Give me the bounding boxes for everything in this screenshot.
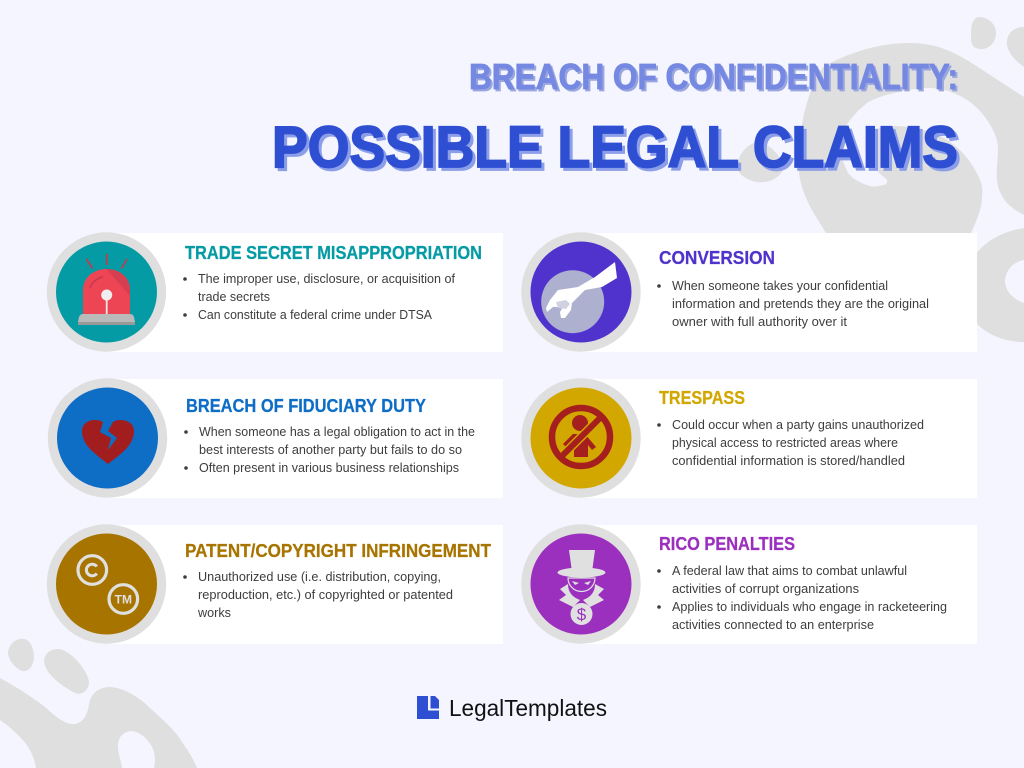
bullet list: Unauthorized use (i.e. distribution, copying,	[198, 570, 441, 584]
icon: broken heart	[82, 420, 134, 464]
bullet list: activities of corrupt organizations	[672, 582, 859, 596]
panel: rico penalties	[521, 524, 977, 644]
bullet list: works	[197, 606, 231, 620]
bullet list: information and pretends they are the original	[672, 297, 929, 311]
bullet list: When someone has a legal obligation to act in the	[199, 425, 475, 439]
bullet list	[657, 418, 924, 468]
heading: BREACH OF FIDUCIARY DUTY	[186, 396, 426, 416]
bullet list: reproduction, etc.) of copyrighted or patented	[198, 588, 453, 602]
icon: copyright and trademark	[78, 556, 138, 613]
main heading: possible legal claims: POSSIBLE LEGAL CLAIMS	[272, 115, 958, 180]
bullet list	[657, 279, 929, 329]
subtitle: breach of confidentiality: BREACH OF CONFIDENTIALITY:	[471, 58, 960, 99]
panel: trespass	[521, 378, 977, 498]
bullet list: Could occur when a party gains unauthorized	[672, 418, 924, 432]
bullet list	[183, 272, 455, 322]
icon: copyright and trademark: TM	[115, 592, 132, 606]
icon: siren	[78, 254, 135, 325]
bullet list: When someone takes your confidential	[672, 279, 888, 293]
subtitle: breach of confidentiality: BREACH OF CONFIDENTIALITY:	[469, 56, 958, 97]
panel: trade secret misappropriation	[47, 232, 503, 352]
footer logo: LegalTemplates: LegalTemplates	[449, 695, 607, 721]
bullet list	[184, 425, 475, 475]
bullet list: owner with full authority over it	[672, 315, 848, 329]
title	[272, 56, 961, 183]
bullet list	[657, 564, 947, 632]
bullet list: A federal law that aims to combat unlawful	[672, 564, 907, 578]
background blobs: bottom left	[0, 639, 197, 768]
panel: patent/copyright infringement	[47, 524, 503, 644]
bullet list: Applies to individuals who engage in racketeering	[672, 600, 947, 614]
panel: breach of fiduciary duty	[48, 378, 503, 498]
bullet list: physical access to restricted areas where	[672, 436, 898, 450]
bullet list: best interests of another party but fails to do so	[199, 443, 462, 457]
bullet list: confidential information is stored/handled	[672, 454, 905, 468]
bullet list: The improper use, disclosure, or acquisition of	[198, 272, 455, 286]
icon: no trespassing	[552, 408, 610, 466]
bullet list: Often present in various business relationships	[199, 461, 459, 475]
bullet list	[183, 570, 453, 620]
heading: RICO PENALTIES	[659, 534, 795, 554]
panel: conversion	[521, 232, 977, 352]
background blobs: top right	[737, 17, 1024, 342]
heading: TRESPASS	[659, 388, 745, 408]
icon: masked criminal	[558, 550, 606, 625]
main heading: possible legal claims: POSSIBLE LEGAL CLAIMS	[275, 118, 961, 183]
icon: hand over circle	[541, 262, 617, 333]
bullet list: Can constitute a federal crime under DTSA	[198, 308, 433, 322]
icon: masked criminal: $	[577, 605, 587, 624]
bullet list: trade secrets	[198, 290, 270, 304]
heading: PATENT/COPYRIGHT INFRINGEMENT	[185, 541, 491, 561]
heading: TRADE SECRET MISAPPROPRIATION	[185, 243, 482, 263]
heading: CONVERSION	[659, 248, 775, 268]
bullet list: activities connected to an enterprise	[672, 618, 874, 632]
